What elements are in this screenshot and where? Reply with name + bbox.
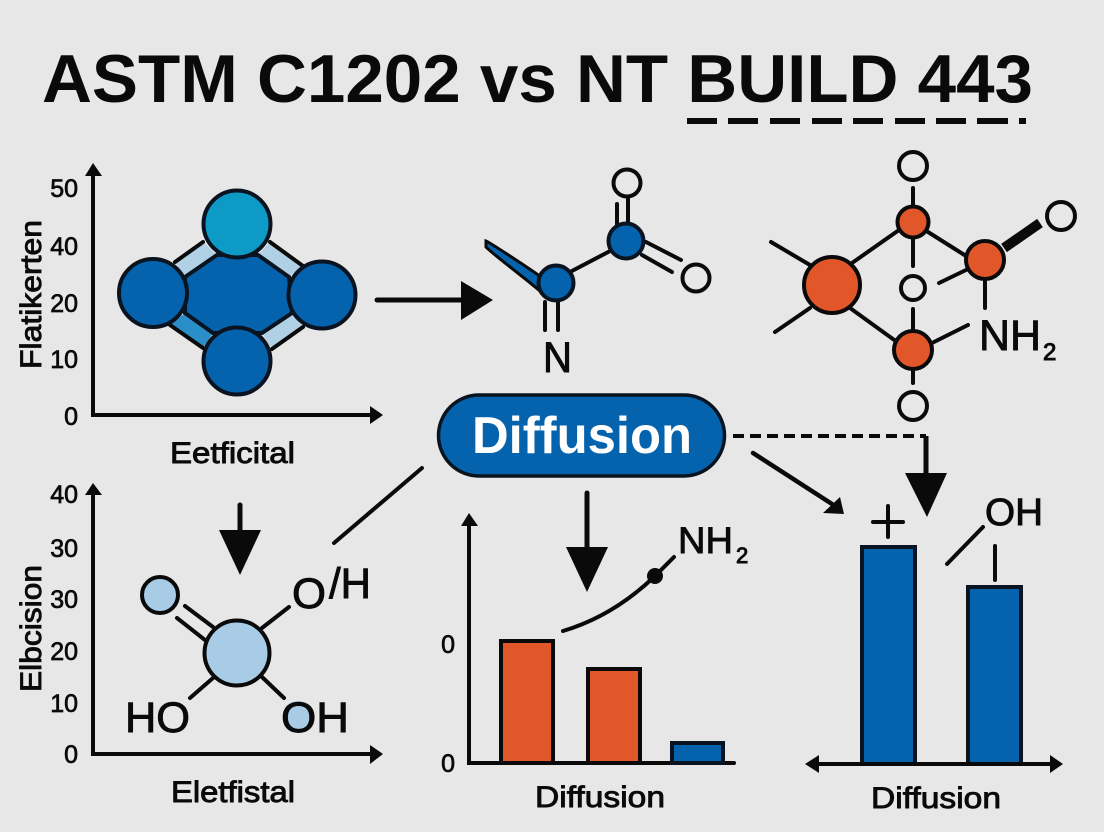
x axis label: Diffusion (535, 781, 665, 814)
arrow: chart to molecule (377, 281, 493, 320)
molecule: orange NH2 structure: NH (979, 312, 1041, 360)
bars (501, 641, 723, 763)
molecule: orange NH2 structure (771, 152, 1075, 420)
molecule: light blue hydroxyl: /H (329, 560, 371, 608)
icon: blue diamond molecule (119, 190, 356, 394)
arrow: down (219, 505, 261, 575)
molecule: light blue hydroxyl: HO (125, 694, 190, 742)
molecule: light blue hydroxyl (125, 560, 371, 742)
panel: right bar chart (805, 492, 1063, 815)
y axis ticks (441, 631, 455, 778)
callout: Diffusion pill: Diffusion (472, 407, 692, 465)
panel: top-left chart with blue molecule (15, 163, 383, 470)
curve with NH2 label (563, 520, 748, 631)
y axis ticks: 0 (64, 403, 78, 431)
chart axes (85, 163, 383, 424)
y axis label: Elbcision (15, 565, 48, 692)
panel: lower-left chart with light molecule (15, 481, 383, 809)
curve with NH2 label: 2 (736, 543, 748, 568)
y axis ticks: 0 (64, 741, 78, 769)
y axis ticks: 0 (441, 750, 455, 778)
OH label with bonds (947, 492, 1043, 580)
molecule: light blue hydroxyl: OH (281, 694, 349, 742)
y axis ticks (50, 481, 78, 769)
panel: middle bar chart (441, 493, 748, 814)
x axis label: Eetficital (170, 437, 295, 470)
chart axis (805, 755, 1063, 773)
y axis ticks: 20 (50, 290, 78, 318)
y axis ticks: 30 (50, 535, 78, 563)
molecule: blue N structure: N (543, 334, 572, 382)
arrow: diagonal line to lower-left molecule (334, 468, 422, 543)
x axis label: Eletfistal (171, 776, 295, 809)
callout: Diffusion pill (438, 395, 724, 476)
arrow: down from pill (566, 493, 608, 592)
OH label with bonds: OH (985, 492, 1043, 534)
y axis ticks (50, 175, 78, 431)
y axis ticks: 10 (50, 690, 78, 718)
y axis ticks: 10 (50, 346, 78, 374)
molecule: light blue hydroxyl: O (292, 570, 326, 618)
y axis ticks: 50 (50, 175, 78, 203)
x axis label: Diffusion (871, 782, 1001, 815)
arrow: diagonal to right chart (753, 453, 844, 514)
y axis ticks: 0 (441, 631, 455, 659)
molecule: blue N structure (486, 170, 710, 382)
y axis label: Flatikerten (15, 220, 48, 369)
chart axes (461, 513, 734, 763)
y axis ticks: 30 (50, 586, 78, 614)
bars (862, 547, 1021, 764)
molecule: orange NH2 structure: 2 (1043, 339, 1056, 366)
title: ASTM C1202 vs NT BUILD 443 (42, 41, 1033, 117)
y axis ticks: 40 (50, 233, 78, 261)
curve with NH2 label: NH (678, 520, 733, 561)
y axis ticks: 40 (50, 481, 78, 509)
arrow: dashed connector (733, 436, 947, 517)
y axis ticks: 20 (50, 638, 78, 666)
chart axes (85, 483, 383, 764)
plus sign (873, 506, 903, 537)
